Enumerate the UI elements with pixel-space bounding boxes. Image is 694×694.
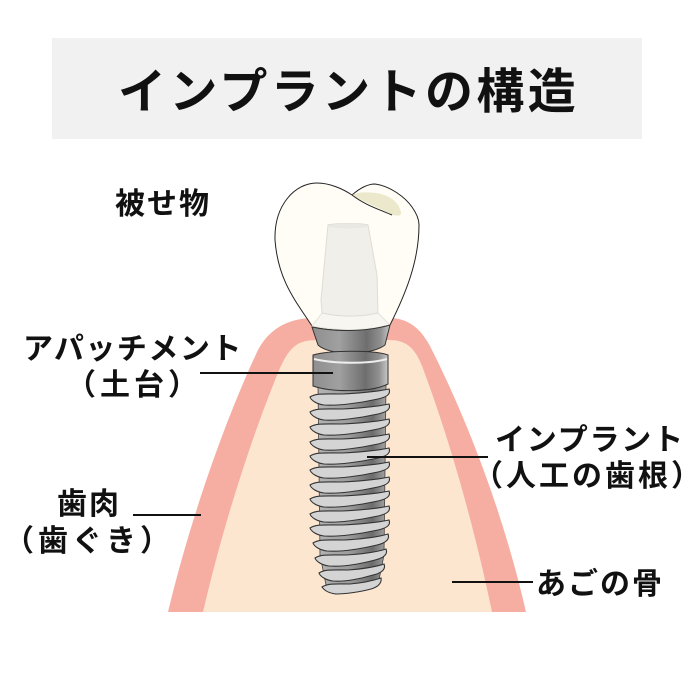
abutment seen through crown — [312, 224, 390, 330]
label: implant — [473, 424, 694, 493]
label: crown: 被せ物 — [115, 188, 211, 221]
label: abutment: （土台） — [66, 369, 202, 402]
label: abutment — [23, 333, 243, 402]
title banner: インプラントの構造 — [118, 66, 579, 119]
label: gum: （歯ぐき） — [4, 525, 174, 558]
jaw bone — [203, 340, 492, 612]
threads — [310, 389, 390, 594]
leader line: gum — [133, 514, 201, 516]
gum — [168, 318, 526, 612]
label: implant: インプラント — [495, 424, 685, 457]
implant fixture — [310, 385, 390, 594]
leader line: implant — [367, 456, 488, 458]
crown highlight — [352, 192, 401, 216]
label: jaw bone: あごの骨 — [536, 567, 664, 601]
tooth crown — [275, 183, 419, 330]
label: gum: 歯肉 — [57, 488, 121, 521]
label: gum — [4, 488, 174, 558]
abutment metal collar — [312, 325, 390, 353]
abutment base — [313, 351, 388, 391]
leader line: jaw bone — [452, 581, 533, 583]
leader line: abutment — [200, 372, 333, 374]
label: abutment: アパッチメント — [23, 333, 243, 366]
title banner — [52, 38, 642, 139]
